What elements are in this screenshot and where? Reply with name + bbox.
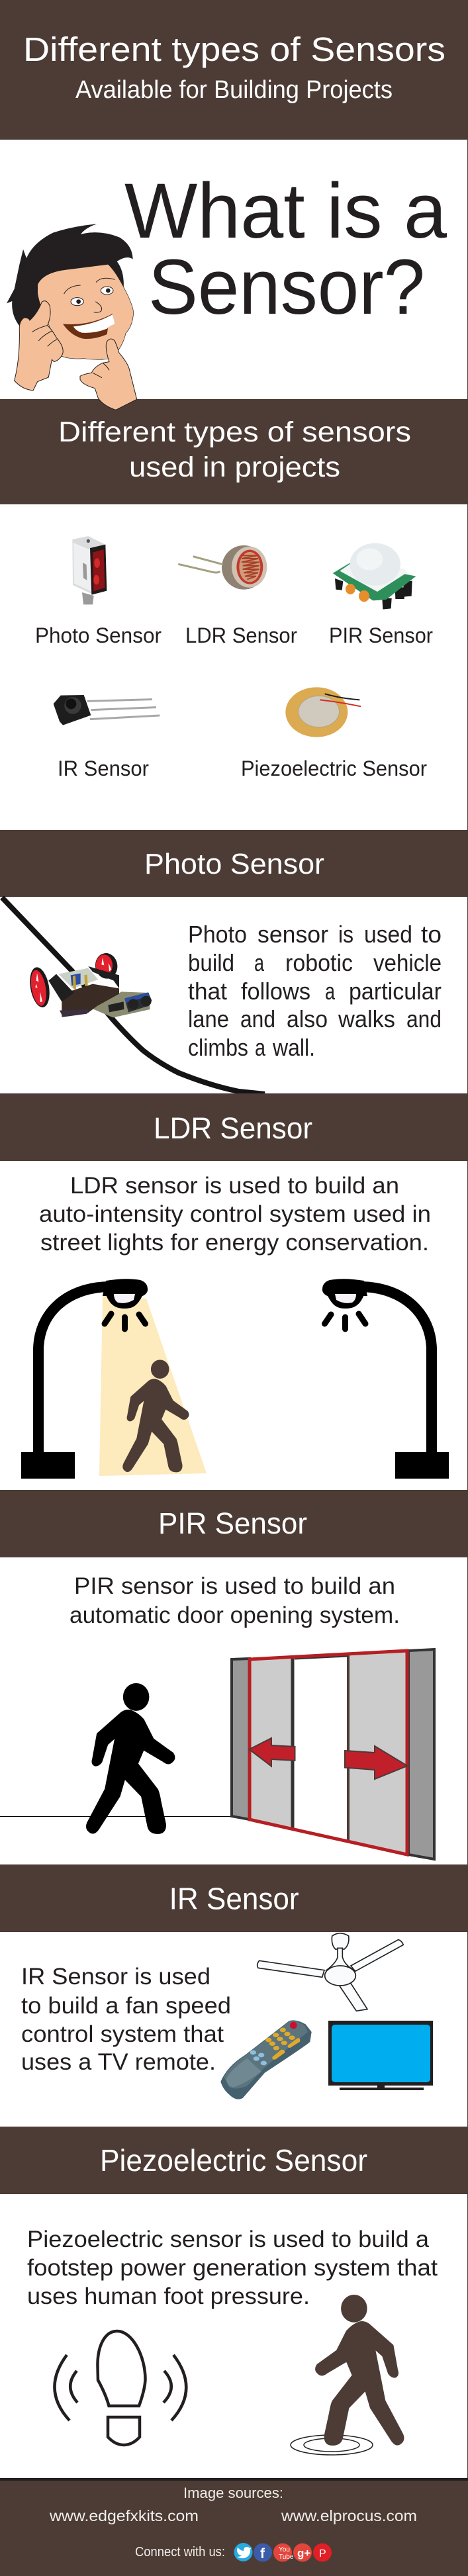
text: photo sensor description: also [287,1005,328,1033]
icon: pinterest: P [319,2548,326,2559]
text: photo sensor description: to [421,921,442,948]
icon: google plus [293,2543,312,2561]
text: photo sensor description: Photo [188,921,247,948]
illustration: light beam [99,1296,207,1476]
icon: pinterest [313,2543,332,2561]
icon: PIR sensor [333,543,416,610]
footer: connect label: Connect with us: [135,2545,225,2559]
panel: sensor catalogue [35,536,433,780]
icon: ceiling fan [257,1933,403,2011]
icon: LDR sensor [178,545,267,590]
text: PIR sensor description: PIR sensor is used to build an [74,1573,395,1599]
text: piezoelectric sensor description: footstep power generation system that [27,2255,438,2281]
footer [0,2478,468,2576]
band: types of sensors heading: used in projects [129,451,340,483]
icon: youtube: Tube [279,2553,294,2561]
text: photo sensor description: sensor [257,921,328,948]
band: types of sensors heading: Different types of sensors [58,416,411,448]
illustration: ground line [0,1816,232,1817]
icon: cartoon man pointing at his face [7,224,137,410]
text: LDR sensor description [39,1173,431,1256]
text: LDR sensor description: auto-intensity control system used in [39,1201,431,1227]
arrow: right door direction [345,1746,408,1779]
text: photo sensor description: vehicle [373,949,442,976]
heading band: IR Sensor: IR Sensor [169,1882,299,1916]
text: piezoelectric sensor description: Piezoelectric sensor is used to build a [27,2227,430,2252]
label: Photo Sensor: Photo Sensor [35,623,162,647]
footer: source one: www.edgefxkits.com [49,2507,199,2524]
icon: lit street lamp [21,1279,148,1479]
text: photo sensor description: and [406,1005,442,1033]
footer: source two: www.elprocus.com [281,2507,417,2524]
icon: robotic vehicle [27,952,152,1017]
band: types of sensors heading [0,399,468,504]
heading: Different types of Sensors: Different types of Sensors [23,30,445,68]
text: IR sensor description: to build a fan speed [21,1993,231,2019]
heading band: PIR Sensor: PIR Sensor [158,1506,307,1540]
heading band: Piezoelectric Sensor: Piezoelectric Sensor [100,2143,367,2178]
text: PIR sensor description: automatic door opening system. [70,1602,400,1628]
text: photo sensor description: is [338,921,353,948]
header band [0,0,468,140]
text: IR sensor description [21,1964,231,2075]
text: photo sensor description: follows [241,978,310,1005]
text: photo sensor description: lane [188,1005,229,1033]
title: What is a Sensor?: Sensor? [148,244,425,331]
heading band: LDR Sensor [0,1093,468,1161]
subheading: Available for Building Projects [75,76,393,104]
text: photo sensor description: a [255,1034,266,1061]
icon: IR sensor [54,695,160,725]
label: LDR Sensor: LDR Sensor [185,623,297,647]
text: photo sensor description: that [188,978,227,1005]
heading band: LDR Sensor: LDR Sensor [154,1111,312,1145]
icon: piezoelectric sensor [285,687,361,737]
icon: person under lamp [123,1360,189,1472]
text: photo sensor description: walks [338,1005,395,1033]
illustration: automatic sliding door [232,1649,434,1859]
label: Piezoelectric Sensor: Piezoelectric Sensor [241,757,427,780]
icon: footprint with vibration waves [54,2331,186,2445]
heading band: PIR Sensor [0,1490,468,1557]
icon: pressure plate rings [291,2435,373,2455]
label: PIR Sensor: PIR Sensor [329,623,433,647]
text: photo sensor description: particular [349,978,442,1005]
heading band: Photo Sensor [0,830,468,897]
title: What is a Sensor? [124,167,447,331]
arrow: left door direction [249,1738,295,1767]
heading band: IR Sensor [0,1864,468,1932]
heading band: Piezoelectric Sensor [0,2127,468,2194]
icon: youtube [273,2543,294,2561]
text: photo sensor description: robotic [285,949,353,976]
icon: TV remote [220,2020,312,2099]
icon: unlit street lamp [322,1279,449,1479]
heading band: Photo Sensor: Photo Sensor [144,848,324,880]
text: LDR sensor description: street lights for energy conservation. [40,1230,429,1256]
icon: twitter [234,2543,253,2561]
text: photo sensor description: build [188,949,234,976]
illustration: lane line track [2,897,265,1094]
text: photo sensor description [188,921,442,1061]
icon: photo sensor [72,536,107,604]
text: piezoelectric sensor description: uses human foot pressure. [27,2283,310,2309]
text: IR sensor description: control system that [21,2021,224,2047]
text: PIR sensor description [70,1573,400,1628]
icon: facebook: f [260,2546,265,2561]
text: IR sensor description: uses a TV remote. [21,2049,216,2075]
title: What is a Sensor?: What is a [124,167,447,255]
text: photo sensor description: and [240,1005,275,1033]
label: IR Sensor: IR Sensor [58,757,149,780]
text: IR sensor description: IR Sensor is used [21,1964,211,1990]
icon: television [328,2021,433,2090]
icon: youtube: You [279,2546,290,2553]
text: LDR sensor description: LDR sensor is used to build an [70,1173,399,1199]
text: piezoelectric sensor description [27,2227,438,2309]
text: photo sensor description: climbs [188,1034,248,1061]
text: photo sensor description: used [364,921,412,948]
icon: person stepping on plate [316,2295,404,2445]
text: photo sensor description: wall. [272,1034,315,1061]
icon: facebook [254,2543,272,2561]
icon: google plus: g+ [297,2547,310,2559]
footer: image sources heading: Image sources: [183,2485,283,2501]
text: photo sensor description: a [325,978,336,1005]
icon: walking person [87,1684,174,1833]
text: photo sensor description: a [254,949,265,976]
